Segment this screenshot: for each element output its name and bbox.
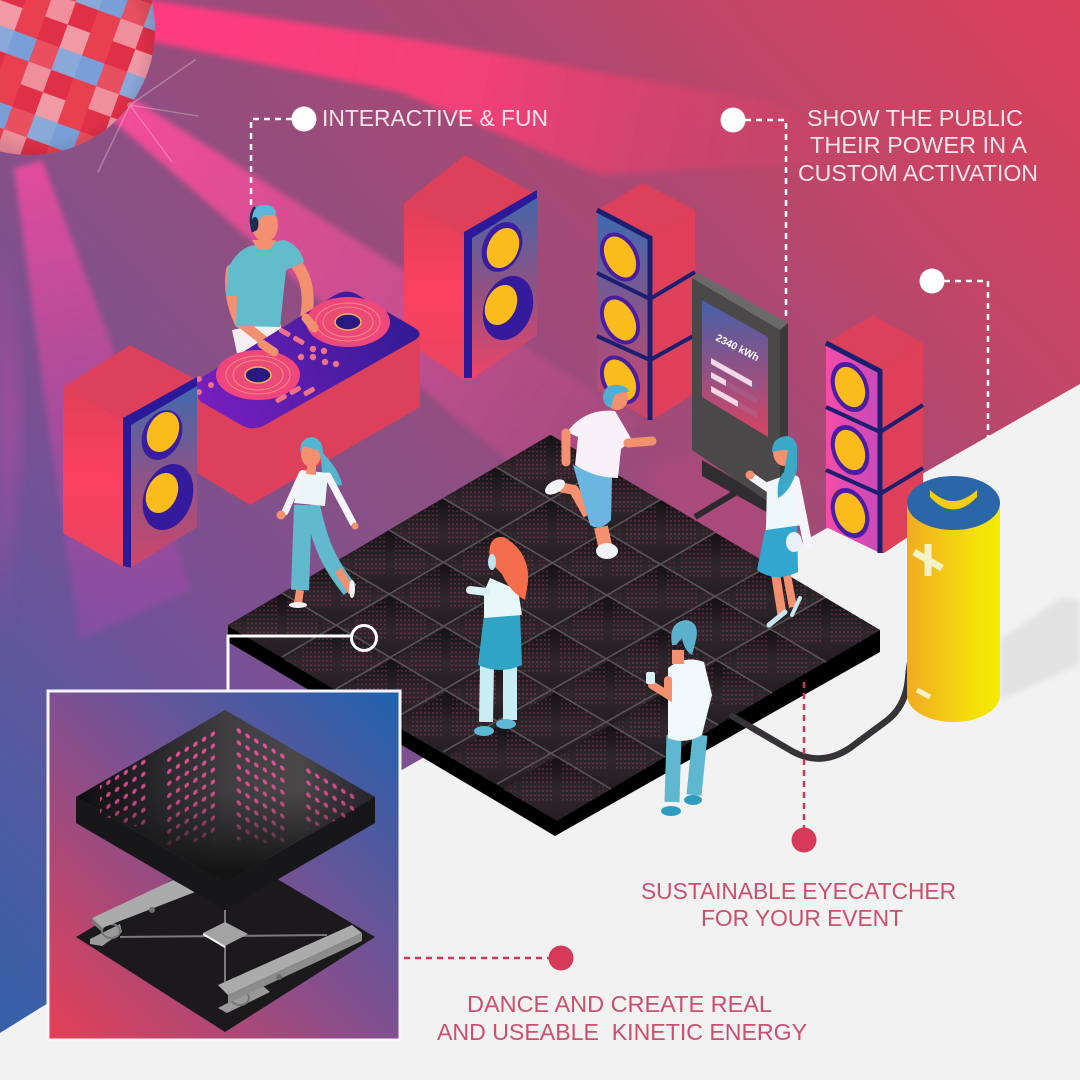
callout: interactive and fun: INTERACTIVE & FUN [322,105,548,131]
callout: kinetic energy: DANCE AND CREATE REAL [467,991,772,1017]
woman walking left [276,437,358,608]
man with cup [646,620,712,816]
disco ball sparkle [98,60,198,172]
callout: custom activation: THEIR POWER IN A [810,132,1028,158]
mixer knobs [196,327,339,404]
disco ball [0,0,155,155]
callout: kinetic energy [404,946,807,1045]
callout: kinetic energy: AND USEABLE KINETIC ENERGY [437,1019,807,1045]
callout: sustainable eyecatcher: SUSTAINABLE EYECATCHER [641,878,956,904]
cable battery to floor [732,640,922,759]
screen bars [711,358,757,418]
woman by the screen [746,436,808,625]
spring rail right [218,925,362,1013]
panel: tile exploded view [48,691,400,1040]
lower plate [76,848,375,1032]
light beams [0,0,880,640]
callout: custom activation: SHOW THE PUBLIC [807,105,1023,131]
LED dots [100,724,355,845]
left turntable [216,350,300,400]
battery [907,476,1000,722]
speaker stack back [592,183,695,420]
upper LED plate [76,710,375,910]
energy display screen [692,273,788,514]
callout: sustainable eyecatcher [641,682,956,931]
screen connector cable [695,493,735,517]
minus sign [917,690,930,697]
callout: interactive and fun [251,105,548,207]
speaker back centre [404,155,542,380]
kinetic dance floor [228,435,880,836]
callout: battery marker [920,268,988,438]
battery shadow [1000,598,1080,700]
plus sign [914,544,942,576]
speaker stack right [824,315,923,553]
screen reading: 2340 kWh [714,332,761,364]
spring rail left [90,880,195,946]
DJ figure [226,205,308,358]
woman with red hair [470,537,528,736]
LED tiles [228,435,880,821]
callout: sustainable eyecatcher: FOR YOUR EVENT [701,905,903,931]
callout: custom activation [720,105,1038,320]
speaker front left [63,345,202,568]
right turntable [306,297,390,347]
detail leader line [228,626,376,690]
DJ booth [196,292,420,505]
callout: custom activation: CUSTOM ACTIVATION [798,160,1038,186]
dancing man [542,385,652,559]
